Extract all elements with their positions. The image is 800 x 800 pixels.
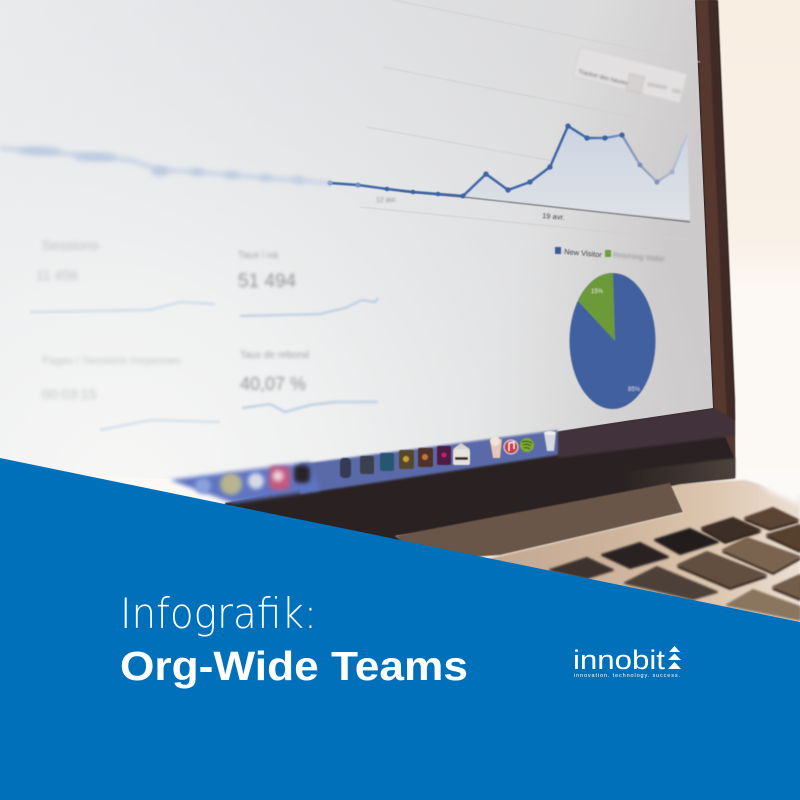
stat: value two: 00:03:15 [42,386,97,402]
laptop screen [0,0,713,479]
dock left blurred section [170,462,320,503]
stat: users: 11 456 [36,267,78,283]
pie chart: 15% [591,289,604,295]
logo tagline: innovation. technology. success. [574,673,680,679]
bezel glossy band [558,408,734,458]
blurred date label: 12 avr. [376,197,397,204]
macOS dock [170,430,558,503]
dock blurred icons [195,465,310,495]
chart area fill [400,126,690,220]
top date range selector [573,47,687,103]
bezel side edge [708,0,735,420]
stat: sessions: Sessions [42,237,99,253]
pie chart legend: Returning Visitor [613,252,666,264]
logo wordmark: innobit [573,645,666,675]
laptop keyboard deck [440,470,800,640]
bezel dark base [225,0,735,560]
date label: 19 avr. [542,211,565,222]
blurred dashboard stats left [36,237,181,402]
blurred left points [18,147,304,183]
bezel bottom lip [620,458,735,494]
blurred dashboard stats right [238,250,309,394]
chart grid lines [367,0,700,186]
title [120,589,468,689]
stat: pages: Pages / Sessions moyennes [42,355,181,367]
logo arrows [668,646,681,669]
blurred sparklines [30,298,378,430]
laptop lid bezel [225,0,735,560]
music icon [504,440,518,454]
stat: value one: 51 494 [238,271,297,292]
dock bar [300,430,558,494]
laptop keys [550,508,800,620]
laptop hinge [395,483,683,560]
innobit logo [573,645,681,679]
key caps [550,508,800,620]
stat: rate: Taux i ua [238,250,278,261]
chart lower rule [360,207,690,240]
pie chart [570,273,656,409]
chart line [330,126,687,196]
pie chart legend [555,247,666,264]
blurred left line [0,148,330,183]
spotify icon [520,438,534,452]
bezel side [696,0,735,460]
chart points [327,123,674,198]
pie chart: 85% [628,387,641,393]
pie chart legend: New Visitor [564,247,603,259]
popcorn icon [490,439,502,458]
line chart [0,0,700,240]
stat: bounce: Taux de rebond [240,350,309,361]
stat: value three: 40,07 % [240,374,306,394]
screen lower glow [0,0,713,479]
chart baseline [400,191,690,222]
blue diagonal panel [0,458,800,800]
top date range selector: Tracker des heures [578,69,629,87]
title line two: Org-Wide Teams [120,643,468,689]
title line one: Infografik: [120,589,317,638]
key shadows [678,510,800,600]
trash icon [544,432,556,451]
dock application icons [340,431,556,478]
